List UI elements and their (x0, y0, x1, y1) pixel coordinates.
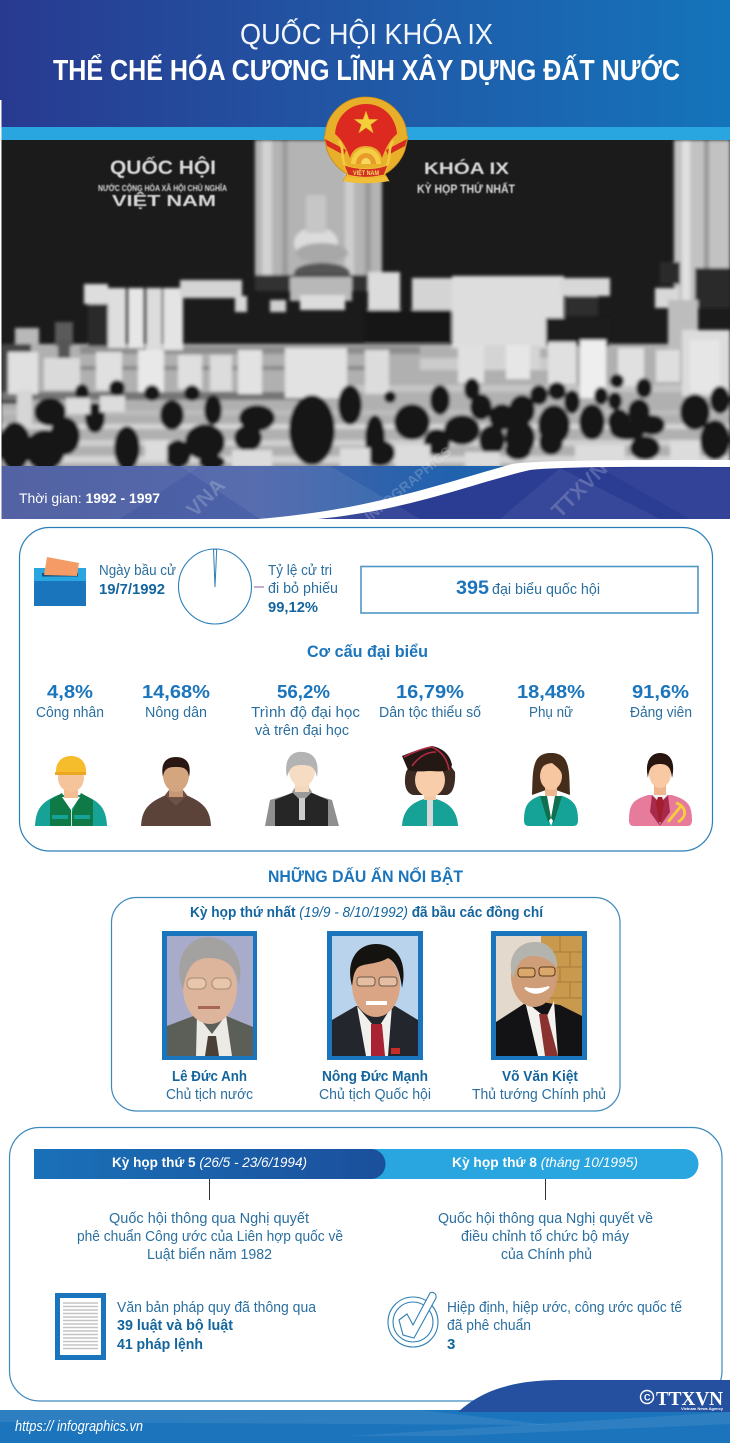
heading: notable highlights: NHỮNG DẤU ẤN NỔI BẬT (268, 866, 464, 886)
voter turnout: đi bỏ phiếu (268, 580, 338, 597)
stat: workers (36, 681, 104, 721)
name: Võ Văn Kiệt: Thủ tướng Chính phủ (472, 1086, 606, 1103)
voter turnout: 99,12% (268, 599, 318, 616)
wall lettering in photo: KHÓA IX (424, 159, 509, 178)
url: https:// infographics.vn (15, 1418, 143, 1435)
icon: check mark (388, 1292, 438, 1347)
stat: party members: 91,6% (632, 681, 689, 702)
icon: document (55, 1293, 106, 1360)
stat: party members (630, 681, 692, 721)
header band (0, 0, 730, 519)
voter turnout: Tỷ lệ cử tri (268, 562, 332, 579)
stat: farmers: Nông dân (145, 704, 207, 721)
session bar: fifth session: Kỳ họp thứ 5 (26/5 - 23/6/1994) (112, 1154, 307, 1170)
stat: women: 18,48% (517, 681, 585, 702)
panel: election overview and delegate structure (20, 528, 712, 851)
wall lettering in photo (98, 157, 516, 210)
stat: workers: 4,8% (47, 681, 93, 702)
voter turnout (268, 562, 338, 616)
callout: 395 delegates: 395 (456, 578, 489, 599)
name: Nông Đức Mạnh (319, 1068, 431, 1103)
callout: 395 delegates: đại biểu quốc hội (492, 581, 600, 598)
footer band (0, 1380, 730, 1443)
stat: ethnic minorities (379, 681, 482, 721)
portrait: Nông Đức Mạnh (327, 931, 423, 1060)
callout: 395 delegates (361, 566, 698, 613)
icon: farmer (141, 757, 211, 826)
icon: national emblem: VIỆT NAM (353, 169, 379, 177)
band: term period: TTXVN (547, 458, 612, 523)
panel: later sessions (10, 1128, 722, 1401)
standing figures (8, 352, 38, 394)
stat: ethnic minorities: Dân tộc thiểu số (379, 704, 482, 721)
band: term period (1, 443, 730, 524)
text: fifth session resolution: phê chuẩn Công ước của Liên hợp quốc về (77, 1228, 343, 1245)
election date (99, 562, 176, 598)
icon: ballot box (34, 557, 86, 606)
portrait: Lê Đức Anh (162, 931, 257, 1060)
stat: workers: Công nhân (36, 704, 104, 721)
text: legal documents passed: 41 pháp lệnh (117, 1336, 203, 1353)
icon: ethnic minority woman (402, 746, 458, 826)
text: treaties ratified: 3 (447, 1336, 455, 1353)
logo: TTXVN: Vietnam News Agency (681, 1406, 724, 1411)
stat: farmers: 14,68% (142, 681, 210, 702)
wall lettering in photo: NƯỚC CỘNG HÒA XÃ HỘI CHỦ NGHĨA (98, 184, 227, 193)
text: fifth session resolution: Quốc hội thông qua Nghị quyết (109, 1210, 310, 1227)
text: legal documents passed: Văn bản pháp quy đã thông qua (117, 1299, 317, 1316)
band: term period: INFOGRAPHICS (362, 443, 454, 524)
heading: delegate structure: Cơ cấu đại biểu (307, 643, 428, 661)
title (53, 17, 680, 87)
stat: university degree: và trên đại học (255, 722, 349, 739)
text: legal documents passed (117, 1299, 317, 1353)
text: fifth session resolution: Luật biển năm 1982 (147, 1246, 272, 1263)
icon: worker (35, 756, 107, 826)
text: eighth session resolution: của Chính phủ (501, 1246, 592, 1263)
text: eighth session resolution: điều chỉnh tổ chức bộ máy (461, 1228, 629, 1245)
stat: women (517, 681, 585, 721)
name: Nông Đức Mạnh: Chủ tịch Quốc hội (319, 1086, 431, 1103)
election date: 19/7/1992 (99, 581, 165, 598)
chart: voter turnout pie (178, 549, 264, 624)
name: Lê Đức Anh (166, 1068, 253, 1103)
stat: university degree: Trình độ đại học (251, 704, 361, 721)
stat: women: Phụ nữ (529, 704, 573, 721)
name: Võ Văn Kiệt (472, 1068, 606, 1103)
text: legal documents passed: 39 luật và bộ luật (117, 1317, 233, 1334)
text: treaties ratified (447, 1299, 683, 1353)
icon: elderly intellectual (265, 752, 339, 826)
title: QUỐC HỘI KHÓA IX (240, 17, 493, 51)
session bar: eighth session: Kỳ họp thứ 8 (tháng 10/1995) (452, 1154, 638, 1170)
stat: farmers (142, 681, 210, 721)
choir right (368, 272, 400, 312)
text: eighth session resolution (438, 1210, 653, 1263)
session bar: fifth session (34, 1149, 386, 1179)
name: Lê Đức Anh: Chủ tịch nước (166, 1086, 253, 1103)
stat: party members: Đảng viên (630, 704, 692, 721)
period label: Thời gian: 1992 - 1997 (19, 490, 160, 506)
band: term period: VNA (182, 474, 230, 522)
panel: first session leaders (112, 898, 620, 1111)
crowd heads (0, 374, 730, 470)
text: fifth session resolution (77, 1210, 343, 1263)
icon: woman delegate (524, 753, 578, 826)
stage floor (1, 344, 730, 468)
choir left (84, 284, 108, 304)
text: treaties ratified: đã phê chuẩn (447, 1317, 531, 1334)
wall lettering in photo: VIỆT NAM (112, 192, 216, 210)
stat: university degree (251, 681, 361, 739)
logo: TTXVN: C (644, 1392, 651, 1402)
icon: national emblem (324, 97, 408, 183)
portrait: Võ Văn Kiệt (491, 931, 587, 1060)
election date: Ngày bầu cử (99, 562, 176, 579)
photo: National Assembly session hall (0, 140, 730, 470)
icon: party member (629, 753, 692, 826)
session heading: Kỳ họp thứ nhất (19/9 - 8/10/1992) đã bầu các đồng chí (190, 905, 544, 921)
name: Nông Đức Mạnh: Nông Đức Mạnh (322, 1068, 428, 1085)
session bar: eighth session (370, 1149, 698, 1179)
stat: ethnic minorities: 16,79% (396, 681, 464, 702)
logo: TTXVN: TTXVN (656, 1388, 724, 1410)
text: eighth session resolution: Quốc hội thông qua Nghị quyết về (438, 1210, 653, 1227)
name: Võ Văn Kiệt: Võ Văn Kiệt (502, 1068, 578, 1085)
text: treaties ratified: Hiệp định, hiệp ước, công ước quốc tế (447, 1299, 683, 1316)
wall lettering in photo: QUỐC HỘI (110, 157, 216, 179)
stat: university degree: 56,2% (277, 681, 330, 702)
wall lettering in photo: KỲ HỌP THỨ NHẤT (417, 181, 516, 196)
name: Lê Đức Anh: Lê Đức Anh (172, 1068, 247, 1085)
